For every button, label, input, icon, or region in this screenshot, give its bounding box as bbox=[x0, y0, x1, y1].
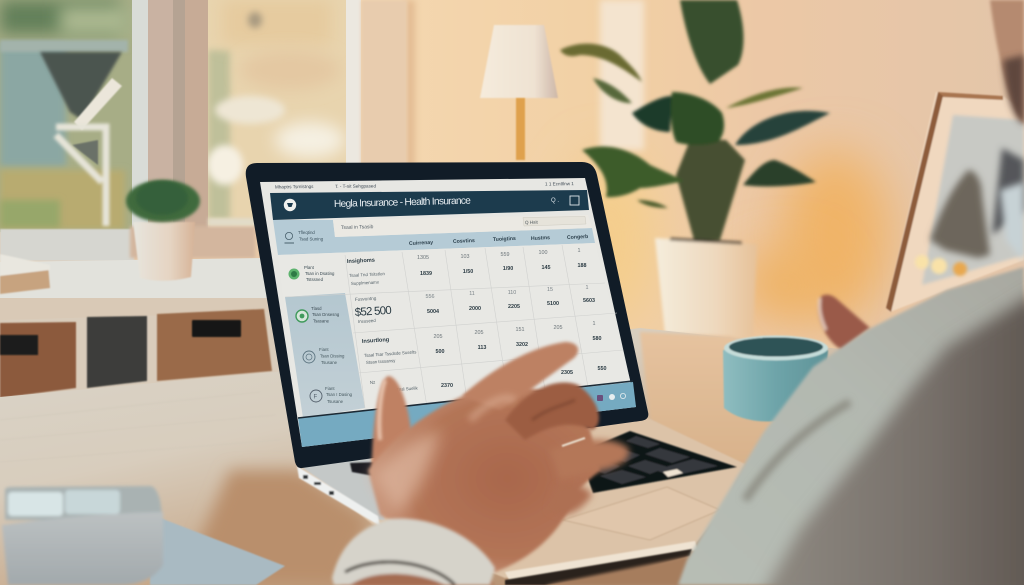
background hand finger bbox=[818, 295, 870, 350]
keyboard bbox=[350, 431, 737, 493]
sidebar row: plan three: Tsan Dissing bbox=[320, 354, 345, 358]
row three values: 580 bbox=[592, 336, 602, 342]
column headers: Congerb bbox=[567, 234, 588, 241]
row two values: 2000 bbox=[469, 306, 481, 312]
ring bbox=[562, 438, 585, 446]
row two values: 5100 bbox=[547, 301, 559, 307]
column headers: Cosvtins bbox=[453, 238, 475, 245]
grey device on desk bbox=[2, 486, 163, 585]
laptop screen content bbox=[260, 178, 636, 447]
row two values: 2205 bbox=[508, 304, 520, 310]
row two values: 11 bbox=[469, 291, 475, 297]
row one values: 1/50 bbox=[463, 269, 473, 275]
row three text: Insurtlong bbox=[362, 337, 390, 345]
sidebar row: plan one bbox=[288, 265, 335, 282]
lower finger bbox=[550, 440, 629, 480]
table body bbox=[278, 243, 630, 417]
shirt body bbox=[760, 290, 1024, 585]
sidebar header: Tsad Suning bbox=[299, 236, 324, 242]
sidebar row: plan two: Tsasane bbox=[313, 318, 330, 324]
row three text: Stsan tsssansy bbox=[366, 358, 396, 365]
column headers bbox=[409, 234, 588, 247]
row one values bbox=[417, 248, 586, 277]
row one values: 188 bbox=[578, 263, 586, 269]
sidebar row: plan one: Tstssned bbox=[306, 277, 324, 282]
sidebar row: plan two: Tsan Dnsesng bbox=[312, 312, 340, 317]
light shoulder band bbox=[678, 267, 1024, 585]
desk surface bbox=[0, 328, 1024, 585]
framed picture bbox=[886, 92, 1024, 312]
wall background bbox=[340, 0, 1024, 345]
row four values bbox=[441, 366, 606, 389]
sidebar row: plan three bbox=[303, 347, 345, 365]
palm in picture bbox=[930, 170, 990, 258]
sidebar row: plan four: Tsusane bbox=[327, 399, 344, 404]
laptop screen bezel bbox=[246, 162, 648, 468]
row one values: 1 bbox=[578, 248, 580, 254]
row one text: Tsaal Tnd Tsitstlon bbox=[349, 271, 386, 278]
sidebar row: plan four bbox=[310, 386, 353, 404]
row one values: 1305 bbox=[417, 255, 429, 261]
footer bar bbox=[298, 381, 636, 447]
row three values: 113 bbox=[478, 345, 486, 351]
column headers: Cuirrenay bbox=[409, 240, 433, 247]
sidebar row: plan two: Tlasd bbox=[311, 306, 322, 311]
sidebar row: plan one: Plant bbox=[304, 265, 315, 270]
sidebar header bbox=[284, 230, 324, 243]
trackpad bbox=[563, 487, 720, 540]
book on shelf bbox=[0, 254, 50, 294]
dark cubby bbox=[87, 316, 147, 388]
sidebar row: plan one: Tsan in Dsating bbox=[305, 271, 335, 276]
middle finger bbox=[505, 383, 599, 440]
row one values: 100 bbox=[538, 250, 548, 256]
head bbox=[990, 0, 1024, 125]
browser top strip: 1 1 Ecnttlnw 1 bbox=[545, 181, 574, 186]
hand over keyboard bbox=[340, 342, 629, 585]
browser top strip: Mhaptrs Tsrnlstngs bbox=[275, 184, 314, 189]
row one values: 1839 bbox=[420, 271, 432, 277]
laptop base and keyboard bbox=[297, 418, 745, 585]
row two price block: Fosvuntng bbox=[355, 296, 377, 302]
row two price block: Insuseed bbox=[358, 318, 376, 324]
sidebar row: plan three: Fiant bbox=[319, 347, 329, 352]
row four text: Tsaal Tnsl Suelik bbox=[385, 385, 419, 393]
large potted plant bbox=[560, 0, 830, 343]
sidebar row: plan four: F bbox=[314, 394, 318, 400]
column headers: Hustms bbox=[531, 235, 550, 242]
table grid bbox=[285, 245, 623, 408]
shoulder fold bbox=[745, 402, 850, 500]
row three values bbox=[434, 321, 602, 355]
floor lamp bbox=[480, 25, 558, 160]
search bar: Q Hsit bbox=[525, 220, 539, 225]
row three values: 3202 bbox=[516, 342, 528, 348]
palm bbox=[368, 385, 600, 572]
silver deck left bbox=[300, 455, 385, 520]
row two values: 110 bbox=[508, 290, 516, 296]
column headers: Tuoigtins bbox=[493, 236, 516, 243]
row one values: 1/90 bbox=[503, 266, 513, 272]
sidebar selected panel bbox=[285, 293, 365, 418]
row two values: 15 bbox=[547, 287, 553, 293]
row two values: 1 bbox=[586, 285, 588, 291]
row three values: 151 bbox=[516, 327, 524, 333]
row two values: 556 bbox=[426, 294, 434, 300]
row two values: 5004 bbox=[427, 309, 439, 315]
row three values: 1 bbox=[592, 321, 596, 327]
right basket bbox=[157, 309, 272, 381]
shelf with storage baskets bbox=[0, 258, 280, 400]
pale side of hand bbox=[372, 430, 440, 515]
title bar: Hegla Insurance - Health Insurance bbox=[334, 196, 471, 210]
sidebar row: plan four: Tsan I Dasing bbox=[326, 392, 353, 397]
row four values: 2305 bbox=[561, 370, 573, 376]
row four text: Nz bbox=[370, 380, 375, 385]
row three values: 205 bbox=[474, 330, 484, 336]
browser top strip bbox=[275, 181, 574, 189]
row three text: Tsaal Tsar Tssdsde Suselts bbox=[364, 349, 417, 358]
row three values: 205 bbox=[434, 334, 442, 340]
row four text bbox=[370, 380, 419, 393]
left basket bbox=[0, 322, 76, 398]
laptop side edge with ports bbox=[297, 466, 380, 526]
row two values: 5603 bbox=[583, 298, 595, 304]
raised thumb bbox=[372, 376, 420, 510]
row three values: 205 bbox=[554, 325, 562, 331]
row three values: 500 bbox=[436, 349, 444, 355]
forearm bbox=[340, 540, 495, 585]
row two price block: $52 500 bbox=[354, 305, 392, 319]
notebook on desk bbox=[150, 514, 285, 585]
teal coffee mug bbox=[723, 336, 828, 422]
row one values: 145 bbox=[542, 265, 550, 271]
sidebar header: Tfleqtind bbox=[298, 230, 315, 235]
row one values: 559 bbox=[500, 252, 510, 258]
row four values: 550 bbox=[598, 366, 606, 372]
row one values: 103 bbox=[460, 254, 470, 260]
row two price block bbox=[354, 296, 392, 324]
sidebar row: plan four: Fiant bbox=[325, 386, 335, 391]
blue header band bbox=[273, 220, 595, 255]
screen surface bbox=[260, 178, 636, 447]
small potted plant bbox=[126, 180, 200, 281]
browser top strip: T. - T-nit Sehgpased bbox=[335, 183, 376, 189]
title bar bbox=[270, 190, 589, 220]
title bar: Q . bbox=[551, 198, 559, 204]
row one text: Insighoms bbox=[347, 258, 375, 265]
row one text: Supplmenamx bbox=[351, 279, 380, 286]
index finger bbox=[462, 342, 578, 410]
row one text bbox=[347, 258, 386, 286]
sidebar row: plan three: Tsusane bbox=[321, 360, 338, 365]
row three text bbox=[362, 337, 417, 365]
row four values: 2370 bbox=[441, 383, 453, 389]
search bar: Tsaal in Tsasib bbox=[341, 224, 374, 231]
search bar bbox=[333, 215, 592, 237]
shirt cuff bbox=[332, 518, 495, 585]
sidebar row: plan two bbox=[296, 306, 340, 324]
window with outdoor view bbox=[0, 0, 407, 330]
row two values bbox=[426, 285, 595, 315]
knuckle highlights bbox=[470, 398, 515, 420]
person in shirt with light shoulder edge bbox=[678, 0, 1024, 585]
